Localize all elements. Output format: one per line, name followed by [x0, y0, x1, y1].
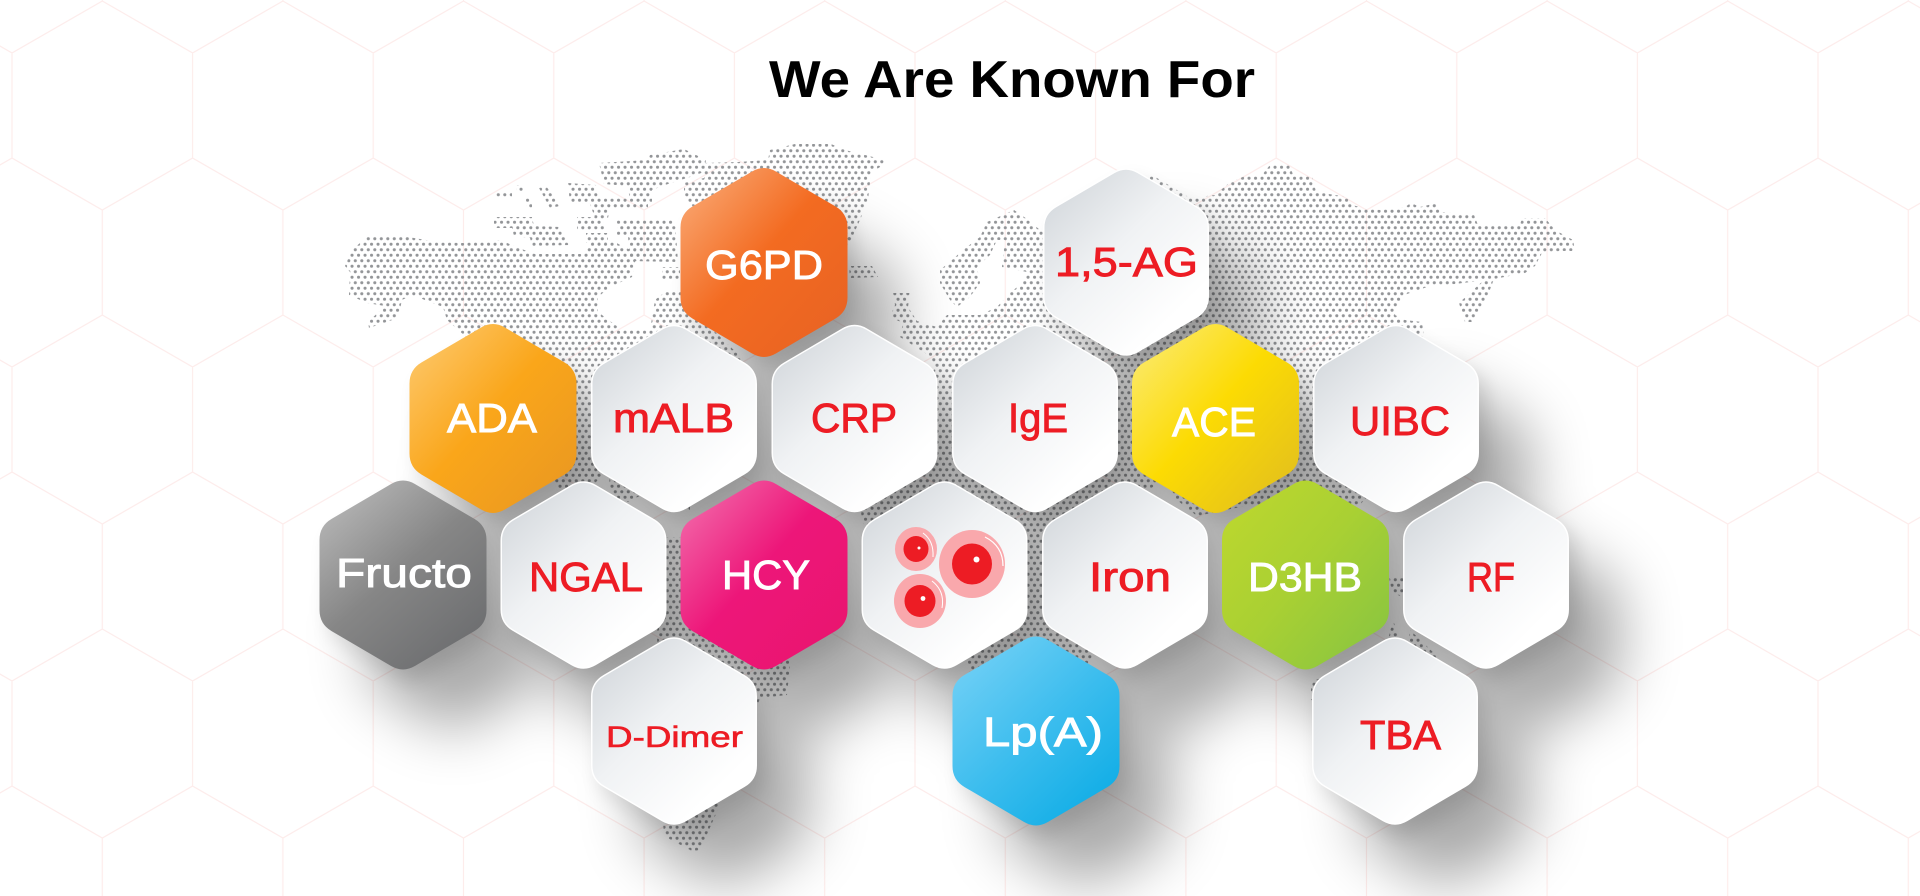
hexagon: 1,5-AG [1044, 169, 1208, 355]
map: Central America islet [683, 505, 690, 512]
hexagon: ACE: ACE [1172, 399, 1256, 445]
hexagon: RF: RF [1467, 554, 1515, 600]
hexagon: mALB: mALB [613, 395, 734, 441]
map: Iceland [846, 236, 878, 278]
map: Greenland [684, 144, 885, 300]
hexagon: Iron: Iron [1089, 554, 1171, 600]
title: We Are Known For [769, 51, 1255, 109]
hexagon: Lp(A) [952, 637, 1120, 825]
map: Australia [1311, 620, 1440, 720]
hexagon: UIBC [1314, 325, 1478, 512]
icon: large blood cell [939, 530, 1005, 598]
hexagon: NGAL: NGAL [529, 554, 643, 600]
hexagon: UIBC: UIBC [1350, 398, 1450, 444]
hexagon: Fructo [320, 481, 486, 669]
hexagon: blood cells icon [862, 482, 1027, 668]
hexagon: NGAL [501, 482, 666, 668]
hexagon: D3HB [1222, 481, 1389, 669]
icon: small blood cell [895, 527, 937, 571]
hexagon: 1,5-AG: 1,5-AG [1055, 239, 1198, 285]
hexagon: HCY: HCY [722, 552, 810, 598]
hexagon: RF [1404, 482, 1568, 668]
map: Indonesia [1389, 577, 1404, 598]
hexagon: Fructo: Fructo [336, 550, 472, 596]
hexagon: D-Dimer: D-Dimer [606, 721, 743, 754]
map: Eurasia and Africa [858, 165, 1575, 690]
hexagon: IgE: IgE [1008, 395, 1068, 441]
dotted world map [345, 144, 1575, 851]
hexagon: ADA [410, 324, 576, 513]
map: North America [345, 236, 742, 502]
cast shadows [326, 179, 1620, 885]
hexagon: G6PD: G6PD [705, 242, 823, 288]
map: South America [657, 537, 790, 851]
hexagon: ADA: ADA [447, 395, 538, 441]
hexagon: Iron [1043, 482, 1207, 668]
hexagon: IgE [953, 325, 1117, 512]
hexagon: D-Dimer [592, 638, 756, 824]
hexagon: Lp(A): Lp(A) [983, 709, 1103, 755]
tight contact shadow [326, 179, 1576, 836]
hexagon: mALB [592, 325, 756, 512]
hexagon: D3HB: D3HB [1248, 554, 1362, 600]
map: Kamchatka [1459, 279, 1494, 322]
hexagon: G6PD [680, 168, 848, 357]
hexagon: CRP [772, 325, 937, 512]
hexagon: HCY [680, 481, 848, 669]
soft long shadow [370, 228, 1620, 885]
hexagon: TBA [1313, 638, 1477, 824]
hexagon: ACE [1132, 324, 1299, 513]
map: Arctic islands [494, 149, 706, 279]
icon: medium blood cell [894, 574, 946, 628]
hexagon: CRP: CRP [811, 395, 897, 441]
hexagon: TBA: TBA [1360, 712, 1442, 758]
